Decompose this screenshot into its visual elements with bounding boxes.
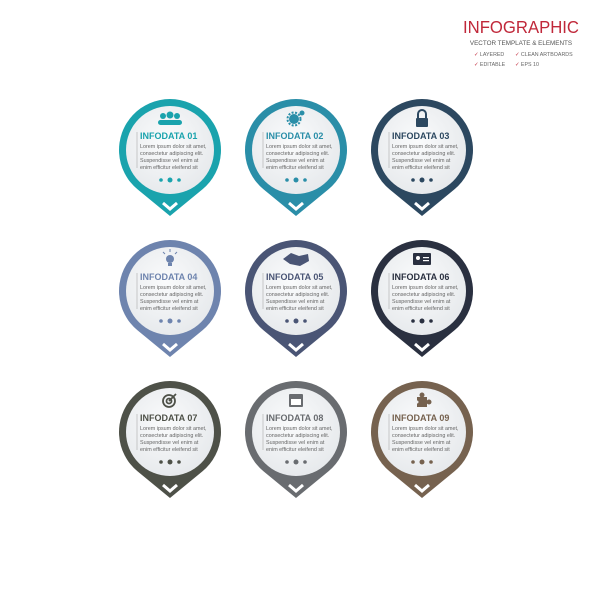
pin 08	[245, 381, 347, 498]
pin 07: consectetur adipiscing elit.	[140, 433, 203, 439]
pin 03: Lorem ipsum dolor sit amet,	[392, 144, 459, 150]
pin 05: INFODATA 05	[266, 272, 323, 282]
pin 05: Lorem ipsum dolor sit amet,	[266, 285, 333, 291]
pin 05: Suspendisse vel enim at	[266, 299, 325, 305]
pin 01: enim efficitur eleifend sit	[140, 165, 198, 171]
pin 08: consectetur adipiscing elit.	[266, 433, 329, 439]
pin 05	[245, 240, 347, 357]
pin 03: INFODATA 03	[392, 131, 449, 141]
pin 02: consectetur adipiscing elit.	[266, 151, 329, 157]
pin 05: enim efficitur eleifend sit	[266, 306, 324, 312]
icon: calendar	[289, 394, 303, 407]
pin 06: INFODATA 06	[392, 272, 449, 282]
pin 04: Lorem ipsum dolor sit amet,	[140, 285, 207, 291]
pin 08: Lorem ipsum dolor sit amet,	[266, 426, 333, 432]
pin 08: enim efficitur eleifend sit	[266, 447, 324, 453]
header: ✓ CLEAN ARTBOARDS	[515, 52, 573, 58]
pin 09	[371, 381, 473, 498]
pin 09: Suspendisse vel enim at	[392, 440, 451, 446]
pin 04	[119, 240, 221, 357]
pin 01: consectetur adipiscing elit.	[140, 151, 203, 157]
pin 07	[119, 381, 221, 498]
header	[463, 17, 579, 68]
pin 06: Lorem ipsum dolor sit amet,	[392, 285, 459, 291]
pin 03: enim efficitur eleifend sit	[392, 165, 450, 171]
pin 01: INFODATA 01	[140, 131, 197, 141]
pin 02: Lorem ipsum dolor sit amet,	[266, 144, 333, 150]
pin 02	[245, 99, 347, 216]
pin 04: INFODATA 04	[140, 272, 197, 282]
pin 06: Suspendisse vel enim at	[392, 299, 451, 305]
pin 04: consectetur adipiscing elit.	[140, 292, 203, 298]
pin 06: enim efficitur eleifend sit	[392, 306, 450, 312]
icon: lock	[416, 110, 428, 127]
pin 02: Suspendisse vel enim at	[266, 158, 325, 164]
pin 07: Suspendisse vel enim at	[140, 440, 199, 446]
icon: bulb	[163, 249, 177, 266]
header: ✓ EDITABLE	[474, 62, 506, 68]
pin 09: INFODATA 09	[392, 413, 449, 423]
pin 04: enim efficitur eleifend sit	[140, 306, 198, 312]
header: ✓ LAYERED	[474, 52, 504, 58]
pin 01	[119, 99, 221, 216]
pin 08: INFODATA 08	[266, 413, 323, 423]
pin 07: enim efficitur eleifend sit	[140, 447, 198, 453]
pin 06	[371, 240, 473, 357]
pin 07: Lorem ipsum dolor sit amet,	[140, 426, 207, 432]
pin 02: enim efficitur eleifend sit	[266, 165, 324, 171]
pin 01: Lorem ipsum dolor sit amet,	[140, 144, 207, 150]
icon: gear	[288, 110, 304, 126]
pin 03: consectetur adipiscing elit.	[392, 151, 455, 157]
pin 09: consectetur adipiscing elit.	[392, 433, 455, 439]
icon: people	[158, 112, 182, 125]
pin 03: Suspendisse vel enim at	[392, 158, 451, 164]
pin 09: enim efficitur eleifend sit	[392, 447, 450, 453]
icon: handshake	[283, 253, 309, 266]
pin 04: Suspendisse vel enim at	[140, 299, 199, 305]
pin 05: consectetur adipiscing elit.	[266, 292, 329, 298]
icon: puzzle	[416, 392, 432, 407]
pin 02: INFODATA 02	[266, 131, 323, 141]
pin 01: Suspendisse vel enim at	[140, 158, 199, 164]
pin 03	[371, 99, 473, 216]
icon: id card	[413, 253, 431, 265]
pin 07: INFODATA 07	[140, 413, 197, 423]
pin 06: consectetur adipiscing elit.	[392, 292, 455, 298]
pin 08: Suspendisse vel enim at	[266, 440, 325, 446]
header: ✓ EPS 10	[515, 62, 539, 68]
icon: target	[163, 394, 176, 407]
header: VECTOR TEMPLATE & ELEMENTS	[470, 40, 572, 47]
header: INFOGRAPHIC	[463, 17, 579, 37]
pin 09: Lorem ipsum dolor sit amet,	[392, 426, 459, 432]
